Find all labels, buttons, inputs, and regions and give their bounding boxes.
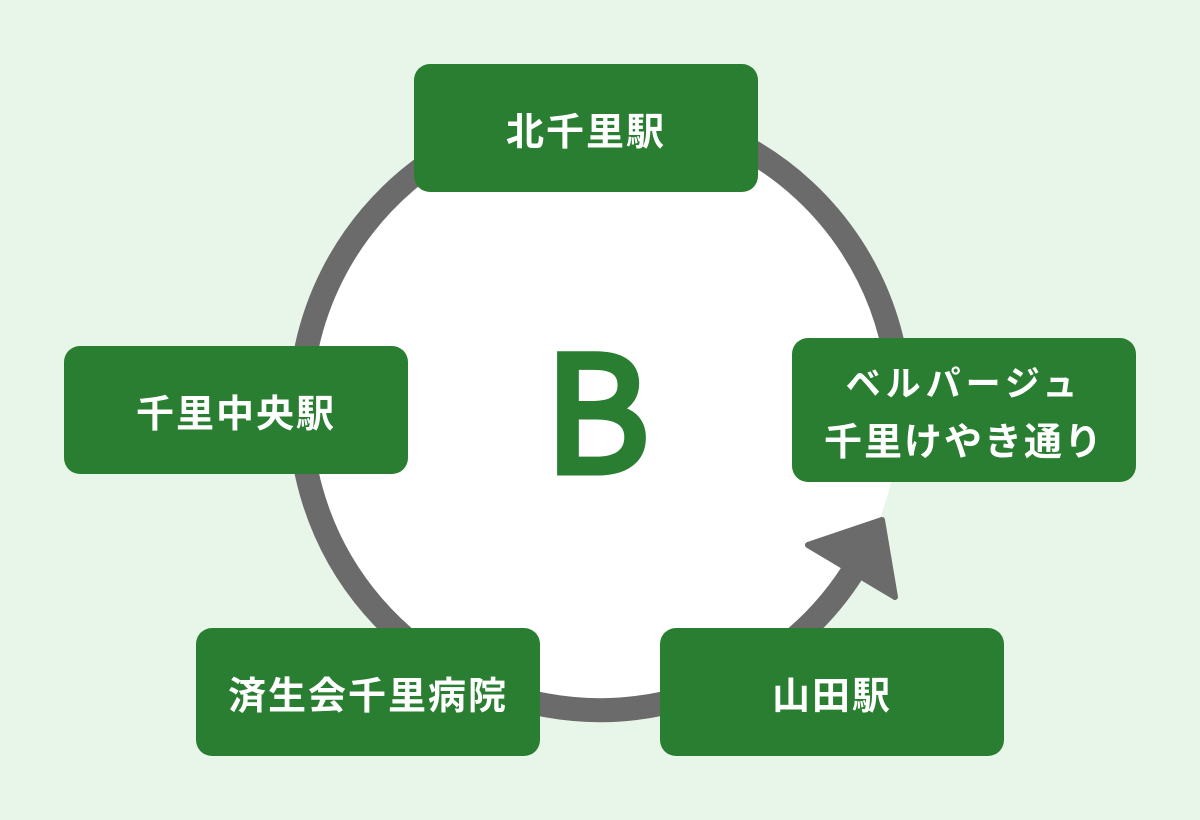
stop: 済生会千里病院 — [196, 628, 540, 756]
stop: 済生会千里病院: 済生会千里病院 — [228, 664, 508, 720]
center letter B: B — [544, 287, 650, 519]
arrow head — [808, 520, 895, 597]
ring arc — [300, 110, 897, 710]
stop: 北千里駅: 北千里駅 — [506, 100, 666, 156]
center white circle — [300, 110, 900, 710]
stop: 山田駅 — [660, 628, 1004, 756]
stop: ベルパージュ千里けやき通り — [792, 338, 1136, 482]
stop: ベルパージュ千里けやき通り: ベルパージュ — [846, 356, 1082, 407]
stop: ベルパージュ千里けやき通り: 千里けやき通り — [824, 411, 1104, 466]
stop: 千里中央駅 — [64, 346, 408, 474]
stop: 北千里駅 — [414, 64, 758, 192]
stop: 千里中央駅: 千里中央駅 — [136, 382, 336, 438]
stop: 山田駅: 山田駅 — [772, 664, 892, 720]
